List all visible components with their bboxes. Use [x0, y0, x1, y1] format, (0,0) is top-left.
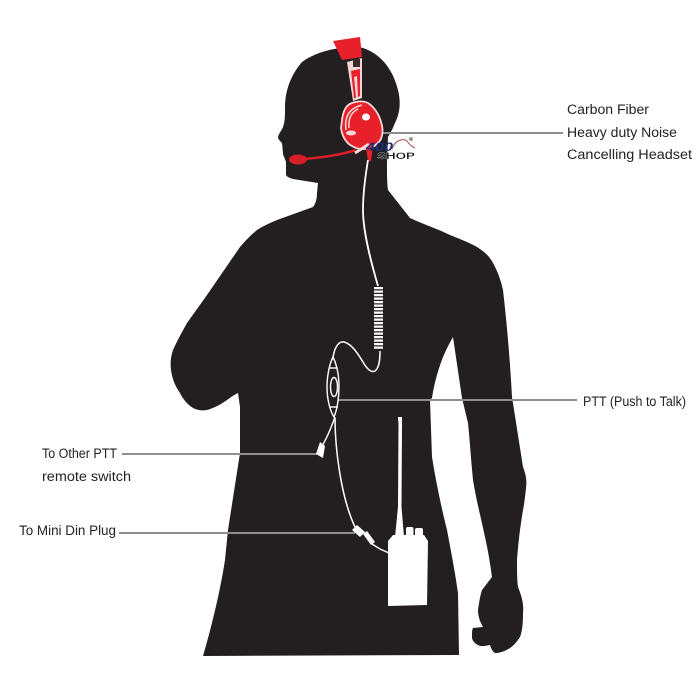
PTT switch [327, 357, 339, 417]
label: other PTT [42, 446, 131, 484]
earcup [341, 102, 382, 149]
microphone boom [305, 150, 356, 159]
PTT upper seam [329, 367, 337, 369]
leader: other PTT [122, 453, 317, 455]
leader: PTT [338, 399, 577, 401]
microphone boom clip [355, 144, 369, 153]
logo registered mark [409, 137, 413, 141]
label line: remote switch: remote switch [42, 469, 131, 484]
cable to radio [372, 544, 389, 553]
mini din plug [352, 525, 375, 545]
headset [289, 37, 382, 164]
earcup lower mark [346, 130, 356, 136]
headband slider [353, 59, 360, 67]
PTT outer body [327, 357, 339, 417]
leader lines [119, 133, 577, 533]
label line: cancelling headset: Cancelling Headset [567, 147, 692, 162]
label: headset [567, 102, 692, 162]
logo number: 400 [365, 140, 393, 154]
label: mini din: To Mini Din Plug [19, 523, 116, 538]
radio body [388, 535, 428, 606]
body silhouette [171, 46, 526, 656]
earcup highlight [362, 114, 370, 120]
branch cable to remote connector [322, 417, 335, 446]
earcup inner arc [346, 105, 362, 130]
remote connector [316, 442, 325, 458]
cable to mini din [335, 418, 355, 527]
label line: to other PTT: To Other PTT [42, 446, 117, 461]
radio antenna [395, 417, 404, 537]
cable strain relief [366, 146, 373, 161]
plug socket [363, 531, 375, 545]
microphone foam [289, 154, 307, 164]
headband strap [347, 58, 362, 101]
PTT button [330, 378, 338, 396]
leader: mini din [119, 532, 355, 534]
logo shop: SHOP [377, 151, 415, 161]
label line: heavy duty noise: Heavy duty Noise [567, 125, 677, 140]
radio knob small [415, 528, 423, 539]
headset cable [363, 160, 378, 286]
headband strap red detail [351, 69, 360, 98]
headband top pad [333, 37, 362, 60]
plug housing [352, 525, 365, 537]
PTT lower seam [329, 406, 338, 408]
coiled cord [374, 287, 383, 350]
logo arc [392, 140, 415, 149]
leader: headset [382, 132, 563, 134]
radio knob large [406, 527, 414, 539]
watermark logo [365, 137, 415, 161]
label: PTT: PTT (Push to Talk) [583, 394, 686, 409]
cable to PTT [333, 342, 380, 372]
label line: carbon fiber: Carbon Fiber [567, 102, 650, 117]
handheld radio [388, 417, 428, 606]
